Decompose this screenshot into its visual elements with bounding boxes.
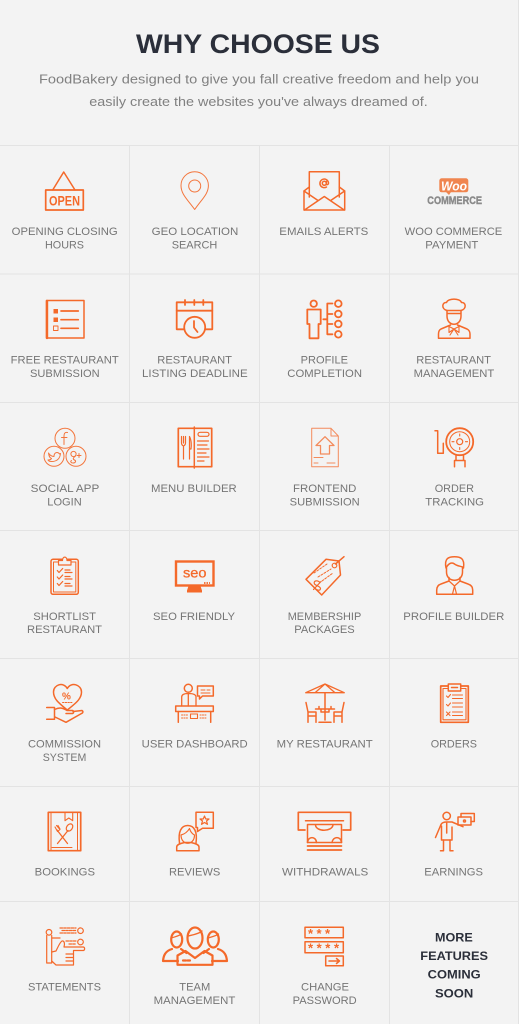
icon: woocommerce logo: COMMERCE <box>427 195 482 207</box>
panel: geo location search: GEO LOCATION <box>152 226 238 238</box>
panel: free restaurant submission: FREE RESTAURANT <box>11 354 119 366</box>
icon: three people <box>163 928 227 965</box>
icon: chef <box>438 299 470 338</box>
panel: earnings: EARNINGS <box>424 867 483 879</box>
panel: emails alerts <box>279 172 368 238</box>
icon: recipe book <box>48 812 81 851</box>
intro text <box>39 72 479 109</box>
panel: social app login: LOGIN <box>47 496 82 508</box>
panel: commission system <box>28 685 101 764</box>
panel: shortlist restaurant: SHORTLIST <box>33 611 96 623</box>
icon: target tracking <box>435 428 473 467</box>
panel: statements <box>28 928 101 994</box>
panel: opening closing hours: OPENING CLOSING <box>12 226 118 238</box>
panel: geo location search: SEARCH <box>172 240 217 252</box>
icon: person holding cash <box>436 812 474 851</box>
icon: open sign: OPEN <box>49 192 80 208</box>
icon: monitor seo: seo <box>183 564 207 580</box>
panel: social app login: SOCIAL APP <box>31 483 99 495</box>
icon: woocommerce logo: Woo <box>441 178 467 194</box>
panel: more features coming soon: SOON <box>435 986 473 1000</box>
panel: order tracking <box>425 428 484 508</box>
icon: price tag <box>306 557 344 595</box>
panel: emails alerts: EMAILS ALERTS <box>279 226 368 238</box>
panel: profile completion: PROFILE <box>301 354 348 366</box>
panel: statements: STATEMENTS <box>28 982 101 994</box>
panel: restaurant listing deadline: RESTAURANT <box>157 354 232 366</box>
panel: change password: CHANGE <box>301 982 349 994</box>
icon: map pin <box>181 172 208 210</box>
icon: person with checklist nodes <box>307 300 342 338</box>
panel: withdrawals: WITHDRAWALS <box>282 867 368 879</box>
icon: calendar clock <box>177 300 212 338</box>
icon: thumb hand with gears <box>46 928 85 965</box>
icon: password fields <box>305 926 343 966</box>
title: WHY CHOOSE US <box>136 29 380 59</box>
panel: profile builder: PROFILE BUILDER <box>403 611 504 623</box>
panel: bookings: BOOKINGS <box>35 867 95 879</box>
icon: order clipboard <box>441 684 468 722</box>
panel: team management: MANAGEMENT <box>154 995 236 1007</box>
panel: commission system: SYSTEM <box>43 752 86 764</box>
panel: my restaurant <box>277 684 373 750</box>
panel: woo commerce payment: WOO COMMERCE <box>405 226 502 238</box>
panel: social app login <box>31 428 99 508</box>
panel: restaurant listing deadline: LISTING DEADLINE <box>142 368 248 380</box>
panel: frontend submission <box>290 428 360 508</box>
panel: more features coming soon: MORE <box>435 930 473 944</box>
panel: menu builder <box>151 427 237 495</box>
panel: profile builder <box>403 557 504 623</box>
panel: woo commerce payment <box>405 178 502 252</box>
icon: open menu <box>178 427 212 468</box>
panel: membership packages: PACKAGES <box>294 624 355 636</box>
icon: heart in hand: % <box>62 692 71 702</box>
panel: profile completion <box>287 300 362 380</box>
panel: order tracking: ORDER <box>435 483 474 495</box>
panel: withdrawals <box>282 812 368 879</box>
panel: team management <box>154 928 236 1007</box>
panel: orders <box>431 684 477 750</box>
panel: order tracking: TRACKING <box>425 496 484 508</box>
panel: restaurant management <box>414 299 495 380</box>
icon: social circles <box>44 428 86 466</box>
icon: woman with star bubble <box>177 812 213 851</box>
panel: frontend submission: SUBMISSION <box>290 496 360 508</box>
panel: user dashboard <box>142 684 248 750</box>
intro text: FoodBakery designed to give you fall creative freedom and help you <box>39 72 479 86</box>
panel: user dashboard: USER DASHBOARD <box>142 738 248 750</box>
panel: geo location search <box>152 172 238 252</box>
icon: clipboard checklist <box>51 557 78 594</box>
panel: frontend submission: FRONTEND <box>293 483 356 495</box>
icon: table with umbrella <box>306 684 344 722</box>
icon: password fields: *** <box>308 926 331 941</box>
icon: man in shirt and tie <box>437 557 473 594</box>
panel: my restaurant: MY RESTAURANT <box>277 738 373 750</box>
icon: document upload <box>312 428 338 467</box>
panel: opening closing hours: HOURS <box>45 240 84 252</box>
panel: more features coming soon: FEATURES <box>420 949 488 963</box>
panel: shortlist restaurant: RESTAURANT <box>27 624 102 636</box>
panel: team management: TEAM <box>179 982 210 994</box>
panel: change password <box>293 926 357 1007</box>
panel: seo friendly: SEO FRIENDLY <box>153 611 236 623</box>
panel: shortlist restaurant <box>27 557 102 636</box>
panel: woo commerce payment: PAYMENT <box>425 240 479 252</box>
panel: profile completion: COMPLETION <box>287 368 362 380</box>
panel: restaurant management: MANAGEMENT <box>414 368 495 380</box>
panel: more features coming soon: COMING <box>428 968 481 982</box>
icon: envelope <box>304 172 345 210</box>
icon: woocommerce logo <box>427 178 482 207</box>
panel: membership packages <box>288 557 361 636</box>
panel: menu builder: MENU BUILDER <box>151 483 237 495</box>
panel: opening closing hours <box>12 172 118 252</box>
panel: orders: ORDERS <box>431 738 477 750</box>
panel: change password: PASSWORD <box>293 995 357 1007</box>
panel: free restaurant submission <box>11 300 119 380</box>
icon: cash machine <box>298 812 351 850</box>
panel: seo friendly <box>153 562 236 623</box>
panel: restaurant listing deadline <box>142 300 248 380</box>
panel: reviews <box>169 812 220 879</box>
icon: person at desk <box>176 684 213 722</box>
panel: membership packages: MEMBERSHIP <box>288 611 361 623</box>
panel: restaurant management: RESTAURANT <box>416 354 491 366</box>
icon: password fields: **** <box>308 940 340 956</box>
intro text: easily create the websites you've always dreamed of. <box>89 95 428 109</box>
panel: bookings <box>35 812 95 879</box>
panel: commission system: COMMISSION <box>28 738 101 750</box>
panel: earnings <box>424 812 483 879</box>
panel: reviews: REVIEWS <box>169 867 220 879</box>
panel: more features coming soon <box>420 930 488 1000</box>
icon: checklist window <box>46 300 84 338</box>
panel: free restaurant submission: SUBMISSION <box>30 368 100 380</box>
